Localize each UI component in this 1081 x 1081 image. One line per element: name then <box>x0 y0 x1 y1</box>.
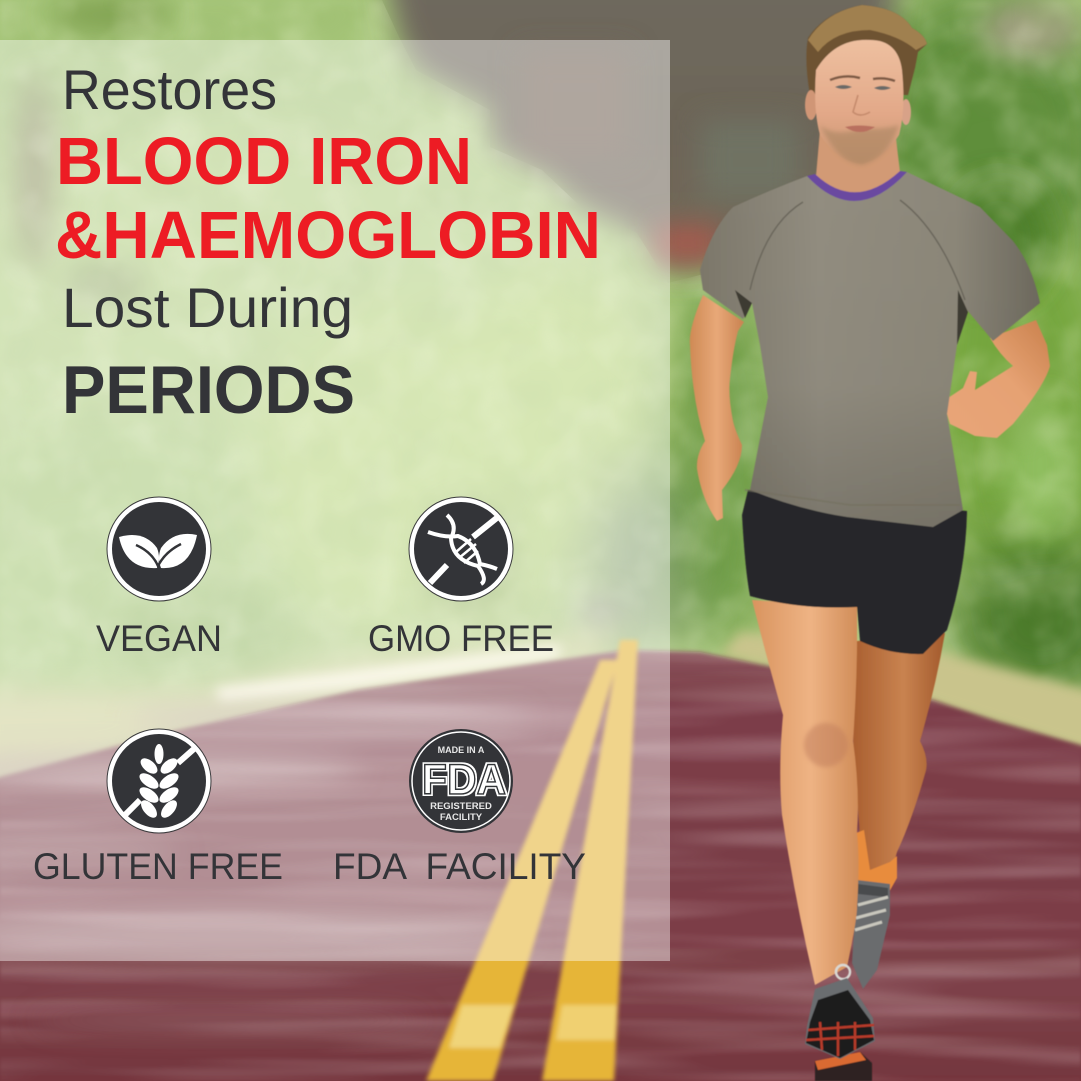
face <box>815 40 903 164</box>
label: GLUTEN FREE: GLUTEN FREE <box>33 846 283 887</box>
nose <box>853 95 870 115</box>
badge: GMO free <box>368 497 554 659</box>
right arm and hand <box>945 320 1050 438</box>
label: GMO FREE: GMO FREE <box>368 618 554 659</box>
hazy mountain side <box>382 0 900 275</box>
road verge <box>0 632 1081 800</box>
purple collar <box>807 171 907 201</box>
neck <box>816 130 900 195</box>
head <box>805 5 927 165</box>
icon: leaves <box>107 497 211 601</box>
icon: crossed DNA <box>409 497 513 601</box>
mouth <box>845 126 875 132</box>
road bands and streaks <box>0 630 1081 1081</box>
icon: FDA registered seal: REGISTERED <box>430 801 492 812</box>
shirt seams <box>745 200 965 505</box>
badge: vegan <box>96 497 222 659</box>
t-shirt <box>700 172 1040 527</box>
heading line: Lost During: Lost During <box>62 276 353 339</box>
heading line: PERIODS: PERIODS <box>62 352 355 428</box>
label: FDA FACILITY: FDA FACILITY <box>333 846 586 887</box>
left arm and hand <box>690 295 744 521</box>
back shoe <box>852 830 897 989</box>
badge: gluten free <box>33 729 283 887</box>
shorts <box>742 490 967 654</box>
back leg <box>853 633 945 878</box>
double yellow road lines <box>426 640 638 1081</box>
beard shadow <box>820 125 899 165</box>
icon: FDA registered seal: FDA <box>422 756 506 804</box>
front shoe <box>805 965 875 1081</box>
label: VEGAN: VEGAN <box>96 618 222 659</box>
heading line: BLOOD IRON: BLOOD IRON <box>56 124 472 199</box>
road surface <box>0 650 1081 1081</box>
icon: crossed wheat <box>107 729 211 833</box>
ears <box>805 90 817 120</box>
runner photo <box>690 5 1050 1081</box>
icon: FDA registered seal: FACILITY <box>440 812 483 823</box>
badge: FDA facility <box>333 729 586 887</box>
armpit shadow <box>735 290 968 345</box>
translucent white panel <box>0 40 670 961</box>
hair backing <box>806 5 927 95</box>
heading line: &HAEMOGLOBIN: &HAEMOGLOBIN <box>55 198 601 273</box>
knee shadow <box>804 723 848 767</box>
heading line: Restores: Restores <box>62 58 277 121</box>
heading <box>55 58 601 428</box>
hair <box>808 5 927 52</box>
foliage texture <box>0 0 1081 682</box>
front leg <box>752 600 858 985</box>
eyes <box>835 85 891 90</box>
forest backdrop <box>0 0 1081 746</box>
icon: FDA registered seal: MADE IN A <box>438 745 485 755</box>
icon: FDA registered seal <box>409 729 513 833</box>
brows <box>830 76 895 81</box>
